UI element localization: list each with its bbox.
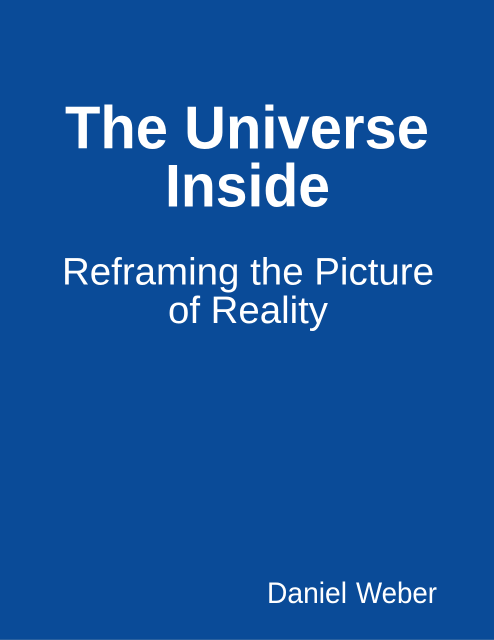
title: Inside <box>165 152 330 220</box>
subtitle: of Reality <box>168 290 328 332</box>
author name <box>267 577 437 610</box>
title <box>65 94 429 220</box>
author name: Weber <box>356 577 437 610</box>
author name: Daniel <box>267 577 347 610</box>
title: The Universe <box>65 94 429 162</box>
subtitle: Reframing the Picture <box>62 252 434 294</box>
subtitle <box>62 252 434 332</box>
